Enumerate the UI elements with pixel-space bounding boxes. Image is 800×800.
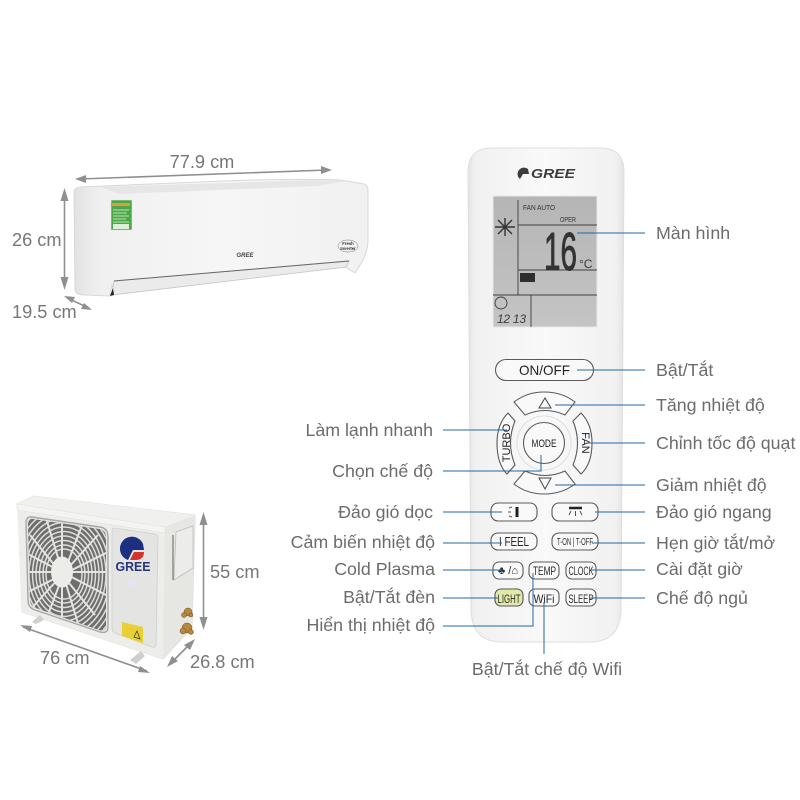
dimension: height 26 cm: 26 cm	[12, 230, 62, 250]
dimension: height 55 cm	[200, 512, 260, 630]
callout: Cài đặt giờ: Cài đặt giờ	[656, 559, 743, 579]
timer button	[552, 533, 598, 550]
callout: Chế độ ngủ: Chế độ ngủ	[656, 588, 748, 608]
TEMP button	[529, 562, 559, 579]
callout: Tăng nhiệt độ: Tăng nhiệt độ	[656, 395, 765, 415]
dimension: width 76 cm	[20, 625, 150, 673]
remote GREE logo: GREE	[531, 167, 576, 181]
callout: Đảo gió ngang: Đảo gió ngang	[656, 502, 772, 522]
LIGHT button: LIGHT	[498, 592, 521, 606]
turbo button: TURBO	[501, 423, 513, 462]
callout: Bật/Tắt: Bật/Tắt	[656, 359, 713, 380]
ON/OFF button	[496, 360, 594, 380]
side handle	[173, 526, 193, 580]
dimension: depth 19.5 cm: 19.5 cm	[12, 302, 77, 322]
callout: Cold Plasma: Cold Plasma	[334, 559, 435, 579]
SLEEP button	[566, 589, 596, 606]
callout: Chỉnh tốc độ quạt: Chỉnh tốc độ quạt	[656, 433, 795, 453]
callout: Làm lạnh nhanh: Làm lạnh nhanh	[305, 420, 433, 440]
callout: Bật/Tắt	[577, 359, 713, 380]
dimension: width 77.9 cm	[75, 152, 332, 183]
brand mark on indoor unit: GREE	[236, 253, 254, 259]
feet	[32, 615, 145, 664]
callout: Hiển thị nhiệt độ	[306, 573, 533, 635]
dimension: width 77.9 cm: 77.9 cm	[170, 152, 234, 172]
LCD screen	[493, 196, 597, 327]
down button	[514, 471, 575, 494]
up button	[514, 392, 575, 415]
indoor unit	[74, 179, 368, 296]
remote control	[468, 148, 624, 642]
dimension: height 26 cm	[12, 188, 68, 290]
LCD screen: OPER	[560, 217, 576, 224]
I FEEL button: I FEEL	[499, 534, 529, 549]
WiFi button: WiFi	[534, 592, 554, 606]
dimension: width 76 cm: 76 cm	[40, 648, 90, 668]
callout: Bật/Tắt đèn: Bật/Tắt đèn	[343, 586, 435, 607]
callout: Đảo gió dọc: Đảo gió dọc	[338, 502, 433, 522]
dimension: depth 19.5 cm	[12, 296, 92, 322]
callout: Giảm nhiệt độ: Giảm nhiệt độ	[656, 475, 767, 495]
CLOCK button	[566, 562, 596, 579]
outdoor unit	[6, 496, 195, 664]
fresh badge: Inverter	[340, 246, 356, 251]
dimension: depth 26.8 cm	[167, 639, 255, 672]
warning sticker	[122, 622, 143, 643]
LCD screen: °C	[579, 257, 593, 271]
cold plasma button	[493, 562, 523, 579]
dimension: depth 26.8 cm: 26.8 cm	[190, 652, 255, 672]
callout: Hiển thị nhiệt độ: Hiển thị nhiệt độ	[306, 615, 435, 635]
callout: Cảm biến nhiệt độ: Cảm biến nhiệt độ	[291, 532, 435, 552]
ON/OFF button: ON/OFF	[519, 362, 570, 378]
vertical swing button	[491, 503, 537, 521]
copper valves	[180, 608, 194, 634]
button ring	[497, 392, 592, 494]
WiFi button	[529, 589, 559, 606]
callout: Hẹn giờ tắt/mở: Hẹn giờ tắt/mở	[656, 532, 776, 553]
callout: Chọn chế độ: Chọn chế độ	[332, 461, 433, 481]
outdoor brand panel	[112, 528, 158, 647]
fresh badge: Fresh	[342, 241, 354, 246]
dimension: height 55 cm: 55 cm	[210, 562, 260, 582]
LCD screen: 12 13	[497, 312, 526, 326]
callout: Chọn chế độ	[332, 455, 541, 481]
callout: Màn hình: Màn hình	[656, 223, 730, 243]
horizontal swing button	[552, 503, 598, 521]
LCD screen: FAN AUTO	[523, 205, 556, 212]
callout: Bật/Tắt chế độ Wifi: Bật/Tắt chế độ Wifi	[472, 658, 622, 679]
energy label	[111, 200, 132, 230]
CLOCK button: CLOCK	[568, 564, 594, 578]
LCD screen: 16	[544, 222, 577, 282]
remote GREE logo	[518, 167, 576, 181]
mode button: MODE	[532, 438, 556, 450]
SLEEP button: SLEEP	[568, 592, 594, 606]
fan button: FAN	[579, 432, 591, 454]
timer button: T-ON | T-OFF	[557, 537, 593, 548]
fresh badge	[338, 240, 358, 252]
TEMP button: TEMP	[533, 564, 556, 578]
snowflake icon	[495, 218, 515, 236]
fan grille	[25, 516, 109, 634]
GREE logo: GREE	[116, 560, 150, 574]
LIGHT button	[495, 589, 523, 606]
cold plasma button: ♣ /⌂	[498, 565, 518, 577]
